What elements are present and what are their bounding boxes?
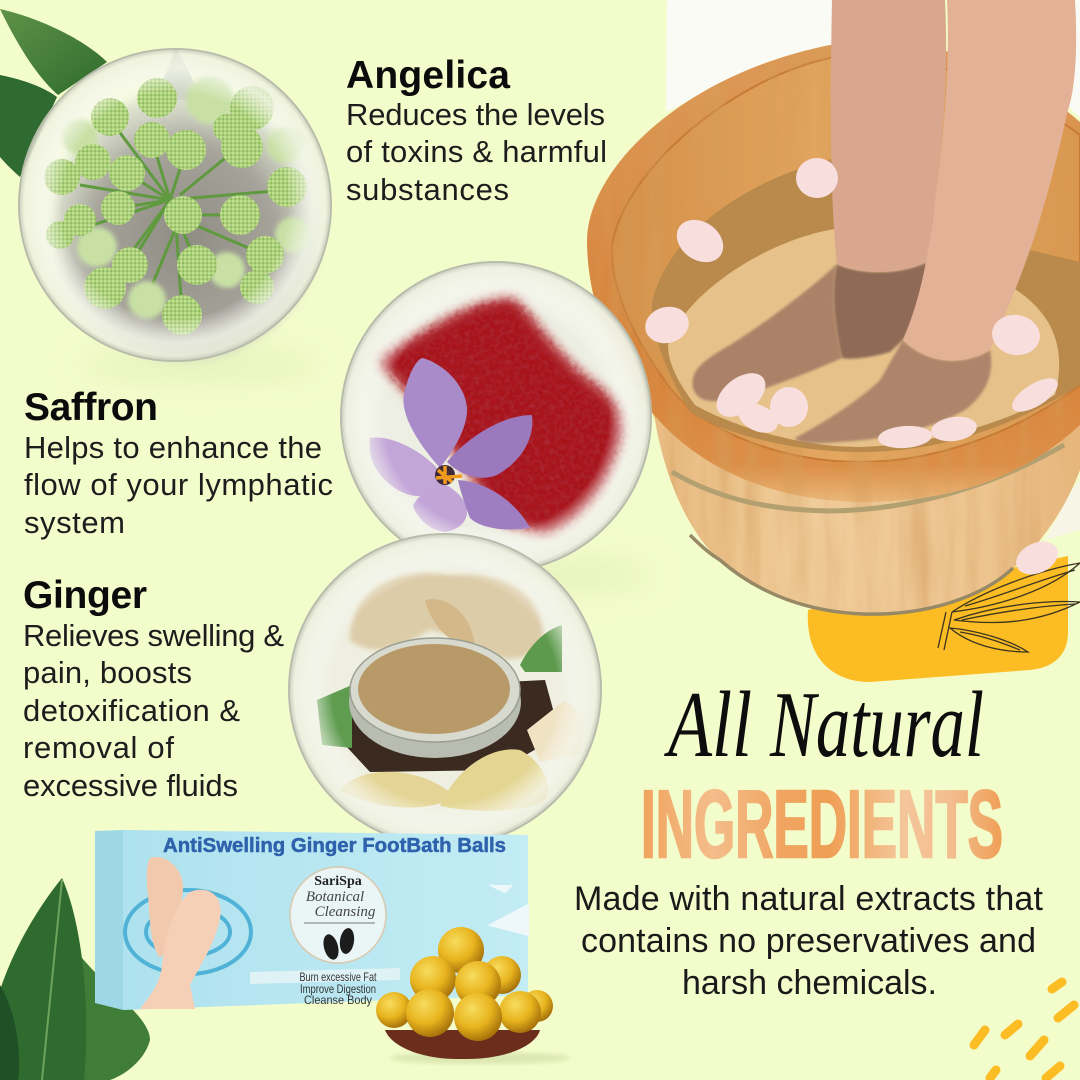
left sole — [147, 857, 183, 958]
dark table — [345, 680, 560, 772]
heading: All Natural script: All — [663, 673, 752, 777]
text block: Saffron: flow of your lymphatic — [24, 467, 333, 502]
florets — [44, 78, 307, 335]
photo bubble: saffron — [340, 261, 652, 573]
box spine — [95, 830, 123, 1010]
text block: Angelica — [346, 54, 607, 207]
photo: wooden foot bath — [587, 0, 1080, 614]
shape: yellow blob behind bucket — [808, 556, 1068, 682]
text block: Ginger: removal of — [23, 730, 174, 765]
product benefits text: Improve Digestion — [300, 982, 376, 996]
faint background florets — [62, 76, 311, 319]
product photo: golden balls in bowl — [376, 927, 570, 1064]
text block: Ginger: pain, boosts — [23, 655, 192, 690]
glass bowl of powder — [349, 638, 521, 758]
product box title: AntiSwelling Ginger FootBath Balls — [163, 835, 506, 857]
heading: All Natural script — [663, 673, 984, 777]
product badge text: SariSpa — [314, 874, 362, 889]
text block: description — [574, 880, 1044, 1002]
text block: Ginger: Ginger — [23, 574, 147, 617]
box landscape stripe — [250, 968, 400, 984]
text block: description: harsh chemicals. — [682, 964, 937, 1002]
photo bubble: angelica — [18, 47, 332, 362]
water ripple rings — [125, 890, 251, 974]
left leg — [831, 0, 946, 272]
product benefits text: Burn excessive Fat — [300, 970, 377, 984]
text block: Ginger: Relieves swelling & — [23, 618, 284, 653]
text block: Angelica: Angelica — [346, 54, 510, 97]
badge divider — [304, 922, 375, 924]
crocus flower — [370, 358, 532, 532]
text block: description: Made with natural extracts that — [574, 880, 1044, 918]
text block: Ginger: excessive fluids — [23, 768, 238, 803]
product badge text — [306, 874, 376, 920]
bucket inner wall — [612, 57, 1080, 462]
text block: Ginger — [23, 574, 284, 803]
rose petals — [641, 158, 1063, 581]
box front — [123, 830, 528, 1010]
panel: white towel — [666, 0, 1080, 540]
photo: product box — [95, 830, 528, 1010]
icon: bottom left leaves — [0, 878, 150, 1080]
heading: All Natural script: Natural — [769, 673, 984, 777]
text block: Ginger: detoxification & — [23, 693, 240, 728]
left ankle underwater — [834, 262, 927, 359]
product benefits text: Cleanse Body — [304, 993, 372, 1007]
saffron threads — [377, 297, 623, 534]
text block: Saffron: Saffron — [24, 386, 158, 429]
footprints — [321, 927, 356, 961]
left foot underwater — [692, 264, 842, 401]
bucket rim — [587, 42, 1080, 502]
crane accents — [490, 885, 528, 935]
right foot underwater — [795, 340, 991, 443]
text block: Angelica: Reduces the levels — [346, 97, 605, 132]
green leaves — [520, 625, 562, 672]
product badge text: Botanical — [306, 889, 364, 905]
ginger root — [350, 573, 543, 659]
icon: top left leaves — [0, 9, 107, 177]
bucket floor — [668, 228, 1059, 447]
water — [652, 158, 1080, 452]
text block: Saffron: Helps to enhance the — [24, 430, 322, 465]
soft shadow under bubbles — [80, 351, 650, 589]
text block: Saffron: system — [24, 505, 125, 540]
text block: Angelica: of toxins & harmful — [346, 134, 607, 169]
logo badge — [290, 867, 386, 963]
ginger slices — [340, 772, 453, 808]
product badge text: Cleansing — [315, 904, 376, 920]
photo bubble: ginger — [288, 533, 602, 847]
right sole — [140, 890, 221, 1009]
text block: Saffron — [24, 386, 333, 540]
decorative dashes bottom right — [974, 982, 1074, 1078]
icon: line-art palm leaf — [938, 563, 1080, 652]
right leg — [903, 0, 1076, 361]
stems — [62, 122, 285, 312]
text block: description: contains no preservatives and — [581, 922, 1036, 960]
text block: Angelica: substances — [346, 172, 509, 207]
product benefits text — [300, 970, 377, 1007]
bucket body — [640, 380, 1080, 614]
